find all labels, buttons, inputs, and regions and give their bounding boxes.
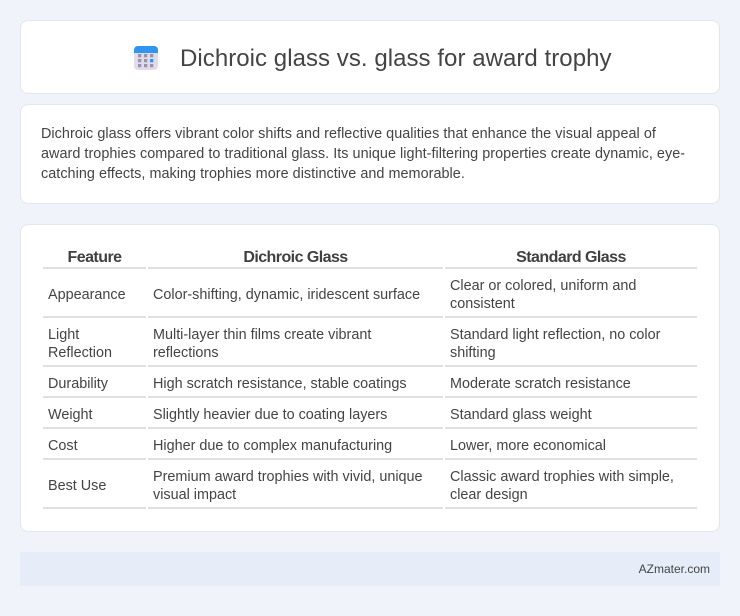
row: durability: Durability: [48, 376, 108, 392]
comparison table: clear design: [450, 487, 528, 503]
title: Dichroic glass vs. glass for award trophy: [180, 45, 612, 72]
comparison table: High scratch resistance, stable coatings: [153, 376, 407, 392]
comparison table: Classic award trophies with simple,: [450, 469, 674, 485]
header: dichroic glass: Dichroic Glass: [243, 249, 348, 266]
comparison table: Higher due to complex manufacturing: [153, 438, 392, 454]
footer credit: AZmater.com: [639, 562, 710, 576]
comparison table: Standard glass weight: [450, 407, 592, 423]
intro text: Dichroic glass offers vibrant color shifts and reflective qualities that enhance the visual appeal of: [41, 126, 656, 142]
comparison table: shifting: [450, 345, 496, 361]
row: appearance: Appearance: [48, 287, 126, 303]
comparison table: Moderate scratch resistance: [450, 376, 631, 392]
header: standard glass: Standard Glass: [516, 249, 626, 266]
intro text: award trophies compared to traditional glass. Its unique light-filtering properties create dynamic, eye-: [41, 146, 685, 162]
row: light reflection: Light: [48, 327, 79, 343]
footer bar: [20, 552, 720, 586]
icon: calendar: [134, 46, 158, 70]
row: weight: Weight: [48, 407, 93, 423]
row: light reflection: Reflection: [48, 345, 112, 361]
comparison table: Color-shifting, dynamic, iridescent surface: [153, 287, 420, 303]
title card: [20, 20, 720, 94]
header: feature: Feature: [68, 249, 121, 266]
intro text: catching effects, making trophies more distinctive and memorable.: [41, 166, 465, 182]
comparison table: Premium award trophies with vivid, unique: [153, 469, 423, 485]
table card: [20, 224, 720, 532]
comparison table: Multi-layer thin films create vibrant: [153, 327, 371, 343]
comparison table: Standard light reflection, no color: [450, 327, 660, 343]
comparison table: Slightly heavier due to coating layers: [153, 407, 387, 423]
comparison table: Clear or colored, uniform and: [450, 278, 636, 294]
comparison table: visual impact: [153, 487, 236, 503]
comparison table: consistent: [450, 296, 515, 312]
intro card: [20, 104, 720, 204]
comparison table: Lower, more economical: [450, 438, 606, 454]
row: best use: Best Use: [48, 478, 106, 494]
intro text: [41, 126, 685, 182]
row: light reflection: [48, 327, 112, 361]
comparison table: reflections: [153, 345, 219, 361]
row: cost: Cost: [48, 438, 78, 454]
